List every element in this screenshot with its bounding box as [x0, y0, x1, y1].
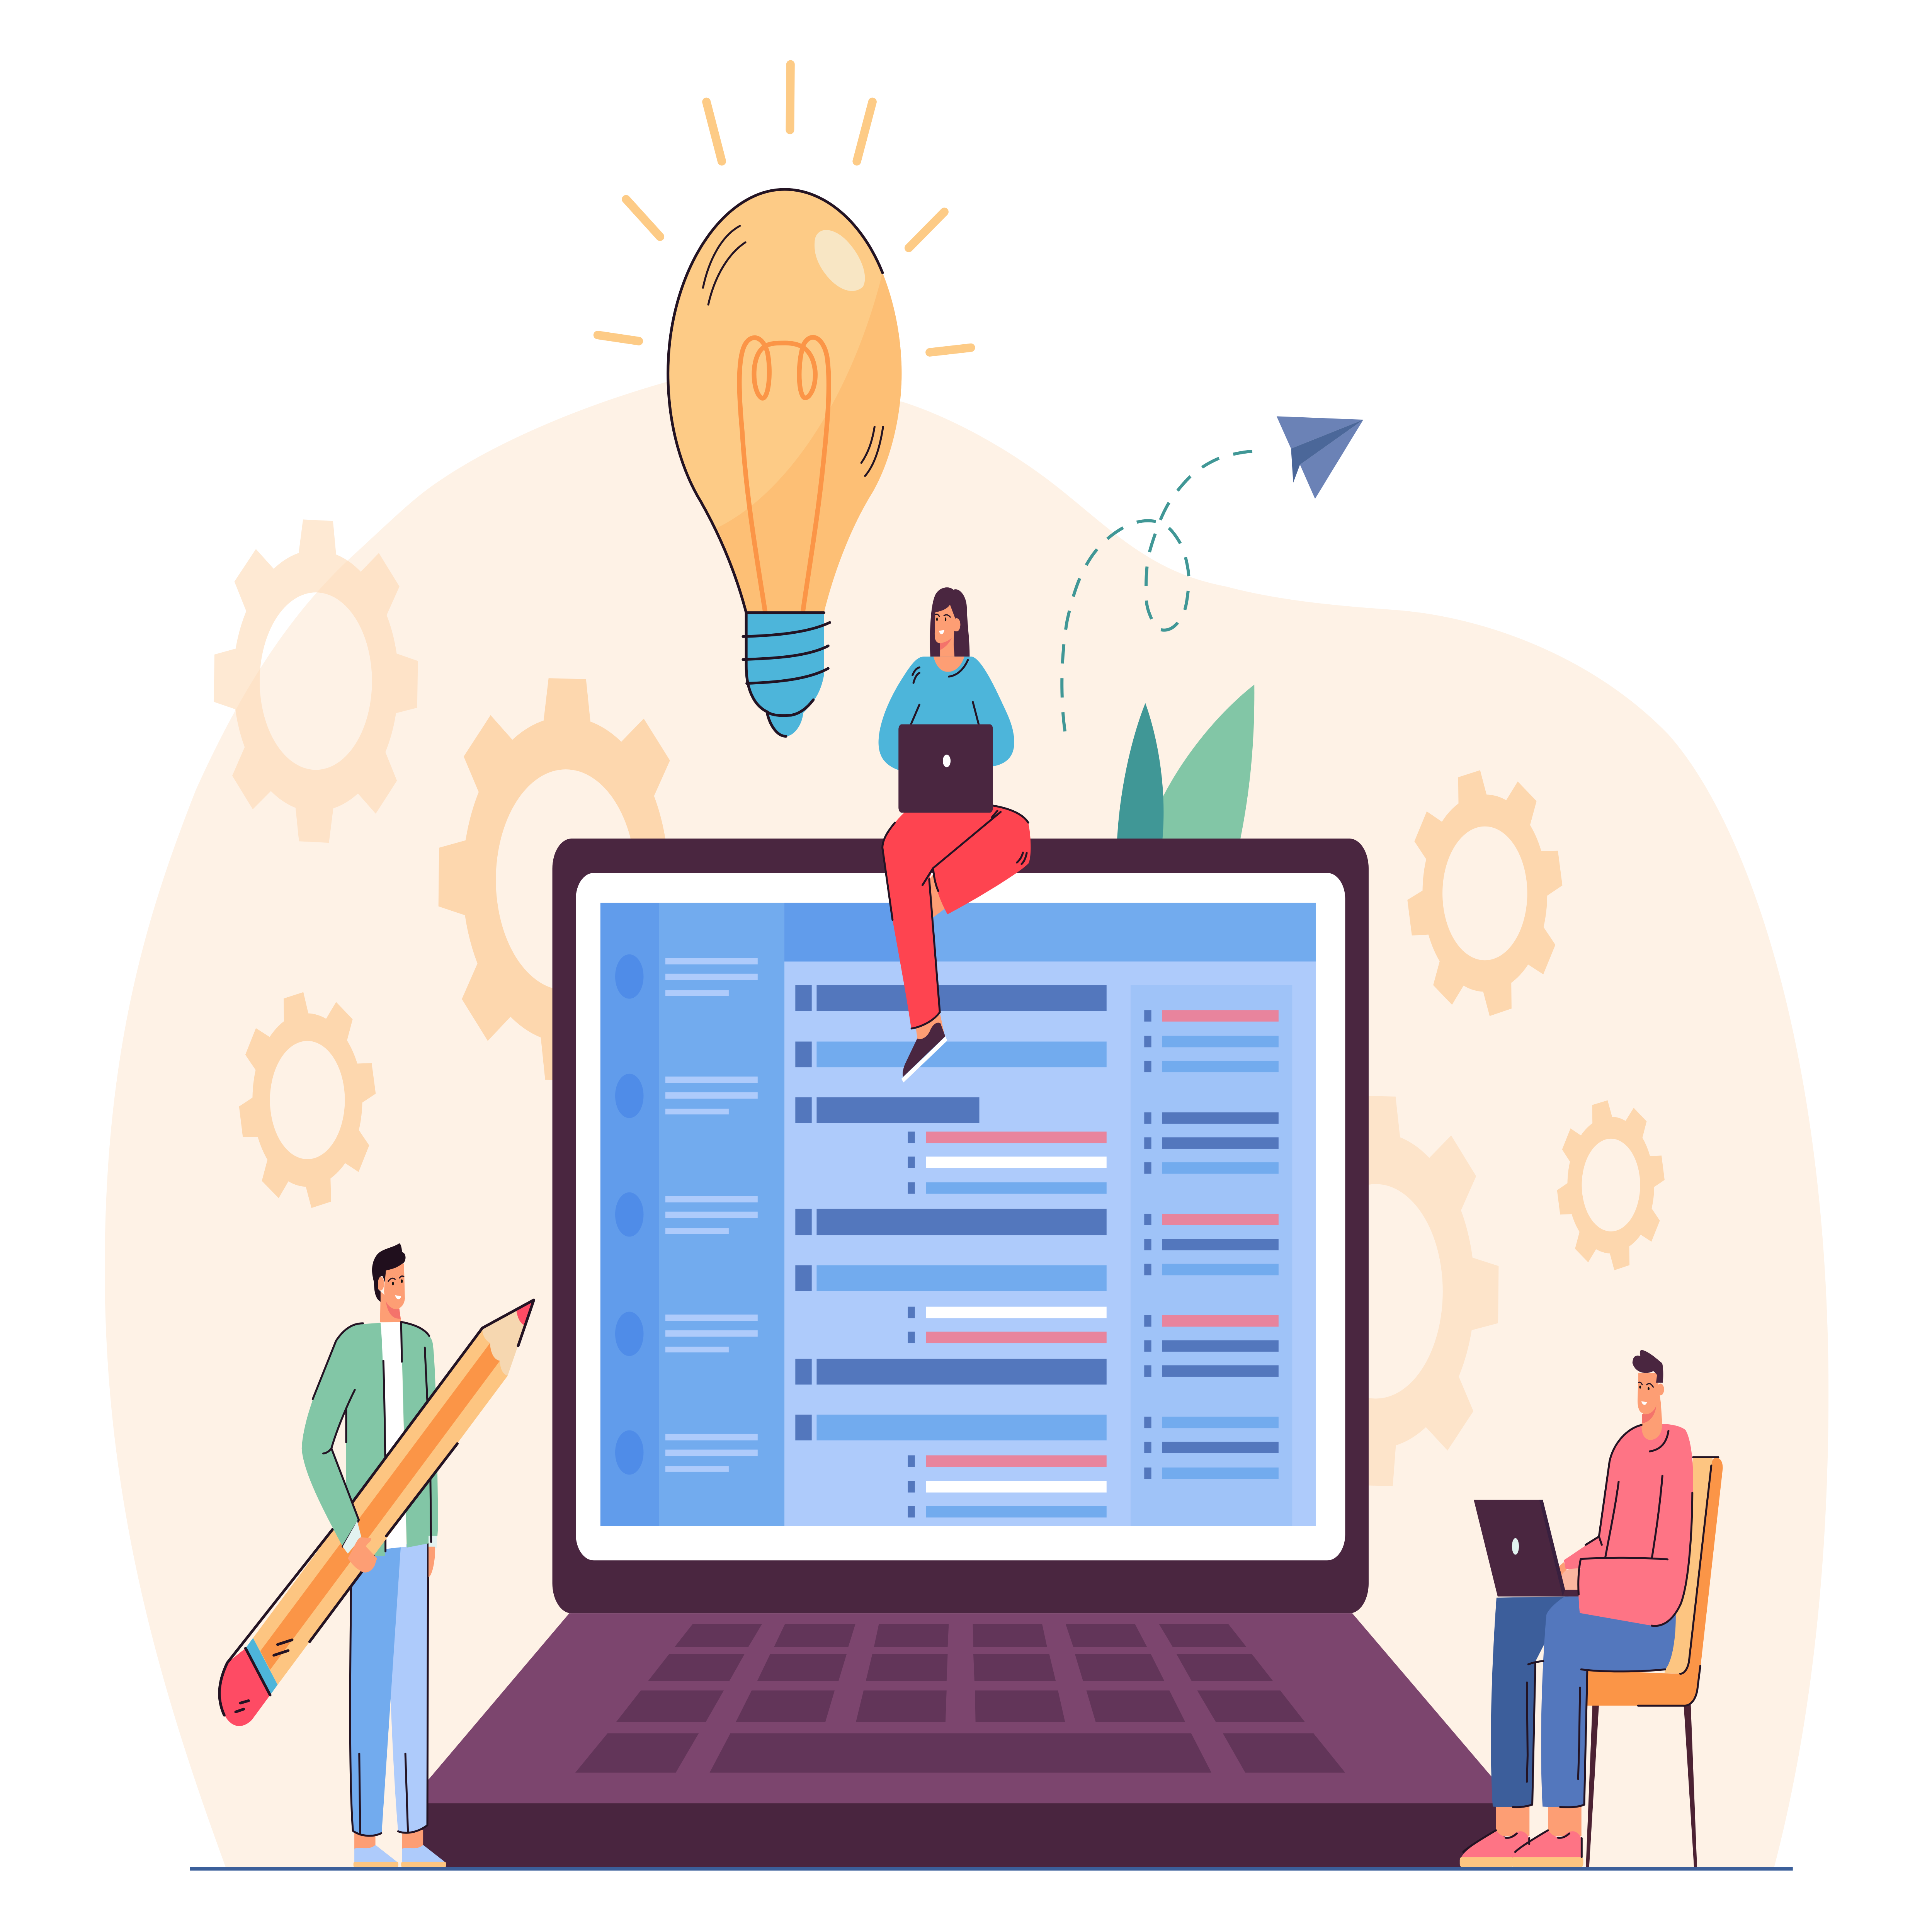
chair back light — [1665, 1458, 1713, 1674]
trouser outlines — [883, 806, 1028, 1029]
gears left — [214, 519, 692, 1208]
pencil — [219, 1300, 534, 1726]
gears right — [1309, 770, 1665, 1486]
bulb screw base — [746, 613, 824, 736]
man holding pencil — [219, 1243, 534, 1867]
left cuff — [343, 1521, 361, 1554]
facial details — [935, 614, 952, 650]
jacket outlines — [346, 1322, 431, 1551]
ear — [1657, 1384, 1664, 1395]
chair outlines — [1638, 1457, 1718, 1706]
main list rows — [795, 985, 1107, 1517]
left hand — [348, 1537, 377, 1573]
ankle — [916, 1014, 945, 1040]
beard shadow — [386, 1301, 401, 1319]
jacket torso right — [401, 1322, 438, 1548]
pencil body — [253, 1329, 508, 1685]
ear — [377, 1277, 384, 1291]
sleeve outlines — [313, 1323, 363, 1547]
pencil wood — [482, 1300, 534, 1376]
back leg — [1491, 1597, 1568, 1807]
neck and face — [1638, 1373, 1662, 1440]
pencil eraser — [219, 1648, 270, 1726]
sweater — [1564, 1424, 1693, 1626]
hands — [1559, 1562, 1580, 1590]
eyes and smile — [1639, 1382, 1653, 1405]
jacket torso left — [346, 1323, 385, 1556]
bulb outlines — [668, 189, 883, 736]
front leg — [1541, 1597, 1676, 1807]
hair — [930, 587, 969, 656]
chair frame — [1586, 1458, 1723, 1706]
sweater outlines — [1578, 1425, 1692, 1626]
white shirt — [381, 1322, 406, 1549]
gear: top left translucent — [214, 519, 418, 843]
jacket sleeve — [302, 1323, 364, 1547]
man on chair with laptop — [1460, 1350, 1723, 1867]
keyboard keys — [575, 1624, 1345, 1773]
app window — [600, 903, 1316, 1526]
light rays — [598, 65, 971, 352]
plane, trail and leaves — [1062, 416, 1363, 842]
eyes and smile — [388, 1276, 404, 1299]
paper plane — [1277, 416, 1363, 499]
dashed flight trail — [1062, 451, 1255, 731]
gear: small lower left — [239, 992, 376, 1208]
shoe — [901, 1023, 947, 1082]
trousers — [883, 806, 1031, 1029]
laptop — [407, 838, 1515, 1868]
bulb shading — [717, 273, 901, 613]
small laptop — [1474, 1500, 1578, 1597]
laptop lid — [552, 838, 1369, 1613]
neckline — [934, 656, 964, 672]
sidebar text lines — [665, 958, 758, 1472]
trouser leg blue — [350, 1544, 401, 1836]
shoes — [354, 1845, 446, 1867]
gear: upper right — [1407, 770, 1562, 1016]
laptop base — [407, 1613, 1515, 1868]
shoes — [1460, 1830, 1583, 1867]
trouser leg light — [385, 1542, 428, 1833]
gear: big behind laptop right — [1309, 1095, 1498, 1486]
sidebar avatars — [615, 954, 643, 1475]
skin behind knee — [929, 874, 945, 918]
sweater — [879, 656, 1014, 770]
leaf: teal — [1117, 703, 1163, 842]
hair — [372, 1243, 406, 1302]
face — [935, 605, 960, 656]
beard shadow — [1642, 1405, 1656, 1423]
gear: big behind laptop — [439, 678, 692, 1081]
ankles — [1496, 1804, 1582, 1836]
bulb glass — [668, 189, 901, 613]
trouser outlines — [1513, 1661, 1665, 1807]
face — [384, 1264, 405, 1310]
leaf: green — [1162, 685, 1254, 842]
woman sitting on laptop — [879, 587, 1031, 1082]
sweater creases — [911, 660, 979, 724]
screen bezel — [576, 873, 1345, 1560]
bulb highlight — [815, 230, 865, 291]
ankles — [354, 1830, 423, 1850]
pencil stripe — [260, 1343, 500, 1670]
ground line — [190, 1867, 1793, 1871]
right cuff and hand — [429, 1536, 437, 1577]
small laptop — [898, 724, 993, 813]
filament — [740, 337, 829, 613]
background blob — [105, 382, 1828, 1867]
chair legs — [1586, 1704, 1697, 1867]
pencil outlines — [219, 1300, 534, 1715]
light bulb — [598, 65, 971, 736]
pencil lead — [516, 1300, 534, 1325]
right side panel — [1131, 985, 1292, 1526]
neck — [380, 1291, 401, 1322]
trouser outlines — [350, 1542, 428, 1836]
hair — [1633, 1350, 1663, 1383]
gear: small right — [1557, 1100, 1665, 1270]
pencil ferrule — [245, 1638, 277, 1695]
